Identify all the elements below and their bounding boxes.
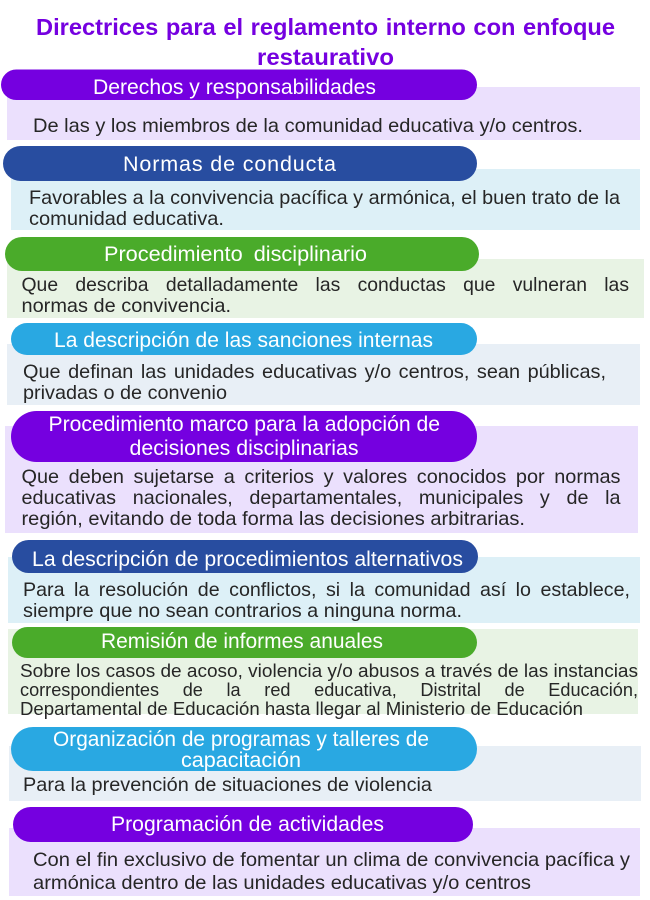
heading pill: derechos: Derechos y responsabilidades [93, 75, 376, 99]
panel: informes anuales [8, 627, 638, 719]
heading pill: actividades [13, 807, 473, 842]
heading pill: procedimiento marco [11, 411, 477, 462]
heading pill: procedimiento [5, 237, 479, 271]
text: sanciones [23, 361, 606, 404]
text: talleres: Para la prevención de situaciones de violencia [23, 774, 432, 796]
text: informes: correspondientes de la red educativa, Distrital de Educación, [20, 679, 638, 700]
text: alternativos: siempre que no sean contrarios a ninguna norma. [23, 600, 462, 622]
heading pill: sanciones: La descripción de las sanciones internas [54, 328, 433, 352]
panel: descripcion de sanciones [7, 323, 640, 405]
heading pill: actividades: Programación de actividades [111, 812, 384, 836]
heading pill: talleres: capacitación [181, 748, 301, 772]
panel: normas de conducta [3, 146, 640, 230]
heading pill: normas [3, 146, 477, 181]
title: Directrices para el reglamento interno con enfoque [36, 14, 615, 40]
text: informes: Departamental de Educación hasta llegar al Ministerio de Educación [20, 698, 583, 719]
text: normas: comunidad educativa. [29, 208, 224, 230]
text: actividades: Con el fin exclusivo de fomentar un clima de convivencia pacífica y [33, 849, 630, 871]
text: procedimiento marco: educativas nacionales, departamentales, municipales y de la [22, 487, 621, 509]
text: procedimiento marco [22, 466, 621, 530]
text: procedimiento: Que describa detalladamente las conductas que vulneran las [22, 274, 629, 296]
heading pill: procedimiento marco: decisiones disciplinarias [130, 436, 358, 460]
text: normas [29, 187, 620, 230]
text: procedimiento: normas de convivencia. [22, 295, 231, 317]
heading pill: alternativos [12, 540, 478, 573]
panel: programas y talleres [9, 727, 641, 801]
text: alternativos [23, 579, 630, 622]
heading pill: informes [12, 627, 477, 658]
text: normas: Favorables a la convivencia pacífica y armónica, el buen trato de la [29, 187, 620, 209]
text: informes: Sobre los casos de acoso, violencia y/o abusos a través de las instancias [20, 660, 638, 681]
heading pill: talleres: Organización de programas y talleres de [53, 727, 429, 751]
panel: procedimiento marco [5, 411, 638, 533]
title [36, 14, 615, 70]
text: actividades: armónica dentro de las unidades educativas y/o centros [33, 872, 531, 894]
text: alternativos: Para la resolución de conflictos, si la comunidad así lo establece, [23, 579, 630, 601]
heading pill: alternativos: La descripción de procedimientos alternativos [32, 547, 463, 571]
text: informes [20, 660, 638, 719]
text: sanciones: Que definan las unidades educativas y/o centros, sean públicas, [23, 361, 606, 383]
panel: procedimientos alternativos [8, 540, 640, 623]
panel: procedimiento disciplinario [5, 237, 644, 318]
heading pill: derechos [1, 70, 477, 100]
heading pill: normas: Normas de conducta [123, 152, 336, 176]
panel: derechos y responsabilidades [1, 70, 640, 140]
heading pill: informes: Remisión de informes anuales [101, 629, 383, 653]
heading pill: sanciones [11, 323, 477, 355]
heading pill: talleres [11, 727, 477, 772]
text: derechos: De las y los miembros de la comunidad educativa y/o centros. [33, 115, 583, 137]
heading pill: procedimiento: Procedimiento disciplinario [104, 242, 367, 266]
heading pill: procedimiento marco: Procedimiento marco para la adopción de [48, 412, 440, 436]
text: procedimiento [22, 274, 629, 317]
title: restaurativo [257, 44, 394, 70]
text: procedimiento marco: Que deben sujetarse a criterios y valores conocidos por normas [22, 466, 621, 488]
text: procedimiento marco: región, evitando de toda forma las decisiones arbitrarias. [22, 508, 525, 530]
panel: programacion de actividades [9, 807, 640, 896]
text: sanciones: privadas o de convenio [23, 382, 227, 404]
text: actividades [33, 849, 630, 894]
